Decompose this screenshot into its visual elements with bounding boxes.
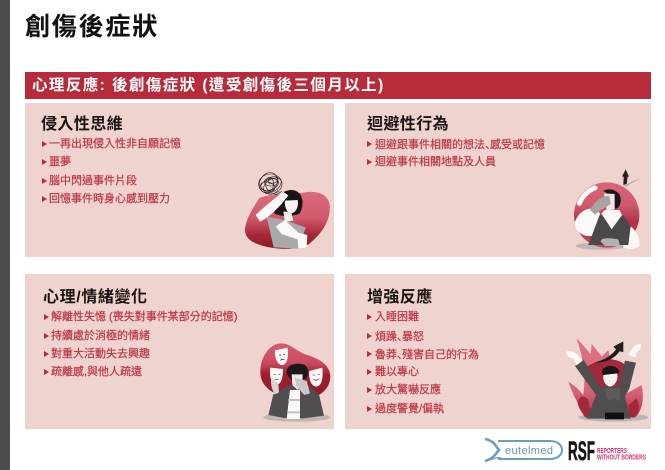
logo: eutelmed xyxy=(485,439,562,461)
logo: eutelmed: eutelmed xyxy=(505,445,553,457)
banner heading xyxy=(25,72,651,99)
panel: intrusive thoughts xyxy=(25,103,334,257)
bullet 2 xyxy=(42,159,47,165)
heading: avoidance behaviour: 迴避性行為 xyxy=(367,116,449,133)
bullet 2 xyxy=(367,159,372,165)
list item 1: 解離性失憶 (喪失對事件某部分的記憶) xyxy=(51,311,237,323)
heading: intrusive thoughts: 侵入性思維 xyxy=(41,116,123,133)
logo: RSF: REPORTERS xyxy=(597,448,627,455)
list item 3: 魯莽、殘害自己的行為 xyxy=(375,346,479,362)
bullet 1 xyxy=(44,314,49,320)
list item 5: 放大驚嚇反應 xyxy=(375,384,441,396)
heading: mood changes: 心理/情緒變化 xyxy=(43,289,148,306)
bullet 6 xyxy=(367,406,372,412)
panel: avoidance behaviour xyxy=(345,103,651,257)
list item 4: 難以專心 xyxy=(375,366,419,378)
bullet 5 xyxy=(367,387,372,393)
list item 2: 噩夢 xyxy=(49,156,71,168)
list item 4: 回憶事件時身心感到壓力 xyxy=(49,193,170,205)
logo: RSF xyxy=(568,436,646,466)
icon: man covering face with arrow xyxy=(574,169,642,250)
title: 創傷後症狀 xyxy=(25,13,159,41)
icon: man with masks xyxy=(260,343,330,422)
list item 2: 持續處於消極的情緒 xyxy=(51,330,150,342)
bullet 1 xyxy=(367,141,372,147)
logo: RSF: RSF xyxy=(568,436,595,466)
list item 3: 腦中閃過事件片段 xyxy=(49,175,137,187)
list item 3: 對重大活動失去興趣 xyxy=(51,348,150,360)
panel: heightened reactions xyxy=(345,274,651,429)
list item 1: 一再出現侵入性非自願記憶 xyxy=(49,138,181,150)
bullet 2 xyxy=(367,333,372,339)
list item 1: 入睡困難 xyxy=(375,311,419,323)
list item 4: 疏離感,與他人疏遠 xyxy=(51,366,142,378)
banner heading: 心理反應: 後創傷症狀 (遭受創傷後三個月以上) xyxy=(32,77,385,94)
list item 2: 迴避事件相關地點及人員 xyxy=(375,156,496,168)
sidebar xyxy=(0,0,10,470)
list item 6: 過度警覺/偏執 xyxy=(375,403,444,415)
logo: RSF: WITHOUT BORDERS xyxy=(597,454,646,462)
bullet 2 xyxy=(44,333,49,339)
bullet 3 xyxy=(44,351,49,357)
list item 2: 煩躁、暴怒 xyxy=(375,328,424,344)
panel: mood changes xyxy=(25,274,334,429)
bullet 1 xyxy=(367,314,372,320)
bullet 1 xyxy=(42,141,47,147)
bullet 4 xyxy=(367,369,372,375)
icon: person raising arms in flames xyxy=(566,338,648,422)
heading: heightened reactions: 增強反應 xyxy=(367,289,433,306)
list item 1: 迴避跟事件相關的想法、感受或記憶 xyxy=(375,136,545,152)
bullet 4 xyxy=(42,196,47,202)
bullet 3 xyxy=(42,178,47,184)
bullet 4 xyxy=(44,369,49,375)
bullet 3 xyxy=(367,351,372,357)
icon: woman with tangled thoughts xyxy=(245,169,330,249)
